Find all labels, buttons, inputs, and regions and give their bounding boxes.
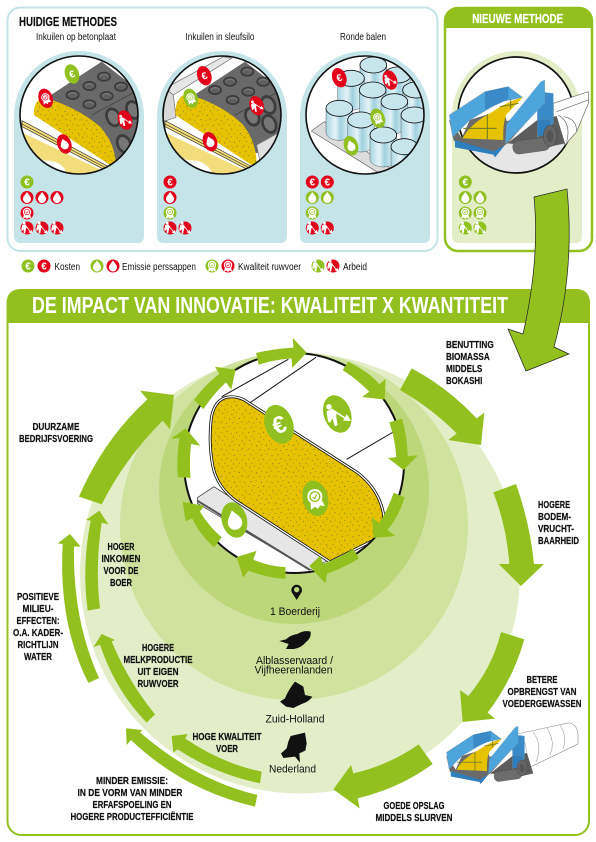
label: hoge kwaliteit voer: VOER bbox=[216, 744, 239, 755]
label: benutting biomassa: MIDDELS bbox=[446, 364, 483, 375]
icon: euro bbox=[194, 64, 214, 87]
icon: euro bbox=[329, 66, 349, 89]
icon: quality bbox=[36, 87, 56, 110]
label: hogere bodemvruchtbaarheid: BODEM- bbox=[538, 512, 571, 523]
label: hogere melkproductie: MELKPRODUCTIE bbox=[124, 655, 193, 666]
panel: impact bbox=[6, 289, 590, 835]
legend bbox=[22, 260, 367, 273]
label: duurzame bedrijfsvoering: DUURZAME bbox=[32, 422, 80, 433]
label: hoger inkomen: VOOR DE bbox=[104, 566, 139, 577]
scene: round bales bbox=[311, 57, 429, 179]
label: goede opslag: MIDDELS SLURVEN bbox=[376, 813, 452, 824]
label: benutting biomassa: BOKASHI bbox=[446, 376, 482, 387]
panel: huidige methodes bbox=[8, 8, 438, 251]
scale circle: Zuid-Holland bbox=[120, 352, 468, 700]
label: goede opslag: GOEDE OPSLAG bbox=[384, 801, 445, 812]
label: positieve milieu-effecten: MILIEU- bbox=[22, 604, 54, 615]
score icons: € bbox=[24, 178, 30, 188]
score icons: € bbox=[167, 178, 173, 188]
label: betere opbrengst: BETERE bbox=[526, 675, 558, 686]
icon: drop bbox=[54, 132, 74, 156]
icon: drop bbox=[200, 130, 220, 153]
label: hogere bodemvruchtbaarheid: BAARHEID bbox=[538, 536, 579, 547]
scene: silage tube truck bbox=[449, 57, 588, 177]
score icons bbox=[20, 176, 64, 234]
icon: labour bbox=[247, 94, 267, 117]
outer arrow: hogere melkproductie bbox=[93, 634, 155, 723]
icon: euro bbox=[259, 401, 299, 448]
legend: Emissie perssappen bbox=[122, 262, 196, 273]
label: benutting biomassa: BIOMASSA bbox=[446, 352, 490, 363]
location label: Alblasserwaard: Alblasserwaard / bbox=[256, 655, 334, 667]
arrow: from new method to impact bbox=[508, 189, 569, 371]
scene: silage on concrete plate bbox=[22, 62, 138, 174]
method label: sleufsilo: Inkuilen in sleufsilo bbox=[186, 32, 255, 43]
icon: quality bbox=[299, 478, 332, 519]
location icon: Nederland map bbox=[281, 733, 307, 763]
panel: nieuwe methode bbox=[445, 8, 592, 251]
score icons bbox=[459, 176, 486, 234]
icon: quality bbox=[181, 87, 201, 110]
icon: drop bbox=[218, 499, 251, 541]
label: hoger inkomen: INKOMEN bbox=[102, 554, 140, 565]
card: ronde balen bbox=[300, 51, 430, 243]
location icon: Zuid-Holland map bbox=[280, 682, 312, 708]
icon: euro: € bbox=[269, 410, 290, 440]
label: hoger inkomen: HOGER bbox=[108, 542, 135, 553]
icon: labour bbox=[380, 68, 400, 92]
label: minder emissie: ERFAFSPOELING EN bbox=[92, 800, 172, 811]
label: positieve milieu-effecten: WATER bbox=[24, 652, 53, 663]
location label: Vijfheerenlanden: Vijfheerenlanden bbox=[254, 664, 332, 676]
legend: Kwaliteit ruwvoer bbox=[238, 262, 302, 273]
outer arrow: betere opbrengst bbox=[460, 632, 524, 722]
outer arrow: goede opslag bbox=[333, 744, 433, 808]
legend: Arbeid bbox=[343, 262, 367, 273]
score icons: € bbox=[463, 178, 469, 188]
legend: € bbox=[41, 262, 47, 272]
icon: drop bbox=[341, 134, 361, 157]
label: minder emissie: IN DE VORM VAN MINDER bbox=[78, 788, 183, 799]
card: inkuilen in sleufsilo bbox=[157, 51, 290, 243]
outer arrow: bodemvruchtbaarheid bbox=[493, 484, 544, 586]
label: minder emissie: MINDER EMISSIE: bbox=[96, 776, 168, 787]
label: betere opbrengst: OPBRENGST VAN bbox=[508, 687, 576, 698]
small truck with silage tube bbox=[446, 723, 578, 784]
outer arrow: hoger inkomen bbox=[85, 511, 108, 611]
label: hoger inkomen: BOER bbox=[110, 578, 133, 589]
label: hogere melkproductie: RUWVOER bbox=[138, 679, 179, 690]
location label: boerderij: 1 Boerderij bbox=[270, 606, 320, 618]
score icons bbox=[164, 176, 192, 234]
outer arrow: hoge kwaliteit bbox=[172, 734, 262, 783]
icon: euro bbox=[62, 62, 82, 86]
icon: quality bbox=[368, 107, 388, 130]
label: hogere bodemvruchtbaarheid: HOGERE bbox=[538, 500, 570, 511]
score icons: € bbox=[310, 178, 316, 188]
method label: ronde balen: Ronde balen bbox=[340, 32, 386, 43]
label: minder emissie: HOGERE PRODUCTEFFICIËNTIE bbox=[70, 810, 194, 823]
method label: betonplaat: Inkuilen op betonplaat bbox=[36, 32, 116, 43]
icon: euro: € bbox=[335, 72, 345, 85]
centre scene: silage bbox=[172, 339, 417, 582]
label: positieve milieu-effecten: POSITIEVE bbox=[17, 592, 59, 603]
label: positieve milieu-effecten: RICHTLIJN bbox=[18, 640, 58, 651]
label: hogere melkproductie: UIT EIGEN bbox=[138, 667, 178, 678]
location label: Zuid-Holland: Zuid-Holland bbox=[266, 714, 324, 726]
scale circle: Nederland bbox=[80, 354, 520, 794]
label: positieve milieu-effecten: EFFECTEN: bbox=[16, 616, 60, 627]
label: positieve milieu-effecten: O.A. KADER- bbox=[13, 628, 63, 639]
label: hoge kwaliteit voer: HOGE KWALITEIT bbox=[192, 732, 262, 743]
icon: labour bbox=[318, 391, 357, 437]
location icon: pin bbox=[291, 585, 302, 600]
score icons: € bbox=[325, 178, 331, 188]
location icon: Alblasserwaard map bbox=[279, 631, 311, 649]
legend: Kosten bbox=[54, 262, 80, 273]
outer arrow: benutting biomassa to bodemvruchtbaarheid bbox=[400, 368, 484, 445]
label: hogere melkproductie: HOGERE bbox=[142, 643, 174, 654]
legend: € bbox=[25, 262, 31, 272]
heading: nieuwe methode: NIEUWE METHODE bbox=[472, 11, 563, 26]
icon: labour bbox=[115, 108, 135, 132]
inner cycle arrows bbox=[172, 339, 417, 582]
location label: Nederland: Nederland bbox=[269, 764, 316, 776]
heading: huidige methodes: HUIDIGE METHODES bbox=[19, 14, 117, 29]
card background bbox=[452, 51, 582, 243]
scale circle: Alblasserwaard bbox=[159, 354, 429, 624]
label: benutting biomassa: BENUTTING bbox=[446, 340, 494, 351]
label: duurzame bedrijfsvoering: BEDRIJFSVOERING bbox=[19, 434, 93, 445]
icon: euro: € bbox=[68, 69, 77, 81]
outer arrow: minder emissie bbox=[126, 728, 257, 807]
scene: silage in bunker silo bbox=[163, 57, 290, 175]
outer arrow: positieve milieu-effecten bbox=[58, 534, 99, 683]
outer arrow: duurzame bedrijfsvoering bbox=[79, 391, 174, 504]
score icons bbox=[306, 176, 334, 234]
label: hogere bodemvruchtbaarheid: VRUCHT- bbox=[538, 524, 574, 535]
icon: euro: € bbox=[200, 70, 210, 83]
card: inkuilen op betonplaat bbox=[14, 51, 147, 243]
